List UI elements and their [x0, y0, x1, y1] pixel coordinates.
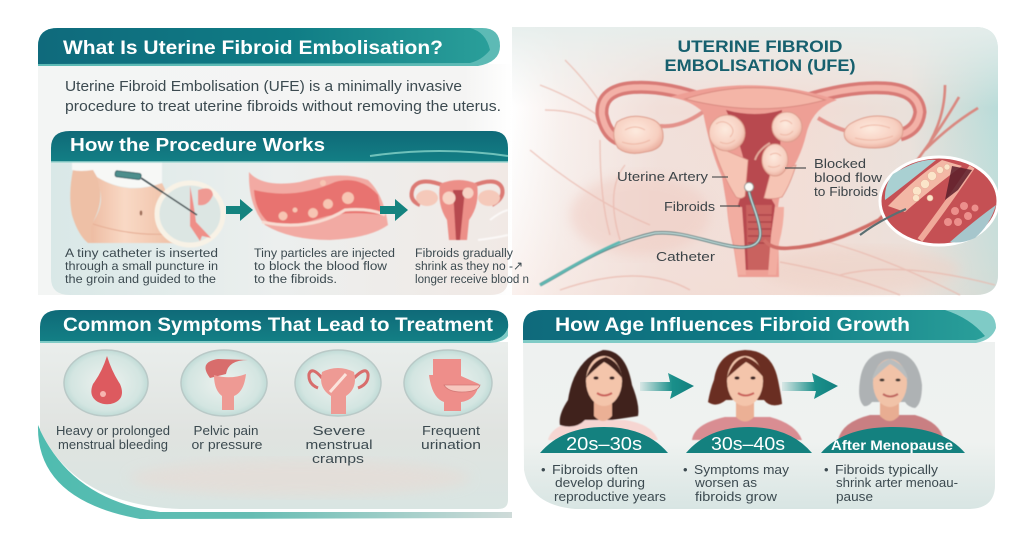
- caption: step 2: [254, 246, 395, 286]
- label: blocked blood flow: to Fibroids: [814, 184, 878, 199]
- text: age 3 note: shrink arter menoau-: [836, 475, 958, 490]
- panel: common symptoms: [38, 310, 512, 519]
- text: age 1 note: reproductive years: [554, 489, 667, 504]
- panel: age and fibroid growth: [523, 310, 996, 509]
- arrow: age 2 to 3: [782, 373, 838, 399]
- badge: 20s-30s: 20s–30s: [566, 434, 642, 454]
- fallopian tubes: [602, 87, 920, 140]
- text: symptom 3: menstrual: [306, 437, 373, 452]
- header: common symptoms: [40, 310, 508, 343]
- illustration: small uterus: [412, 180, 508, 240]
- right artery: [764, 167, 912, 248]
- inset: blocked artery close-up: [860, 157, 998, 245]
- header: age and fibroid growth: How Age Influences Fibroid Growth: [555, 315, 910, 336]
- caption: step 3: Fibroids gradually: [415, 246, 514, 260]
- right-side artery branches: [912, 85, 978, 167]
- illustration: artery cross-section: [249, 172, 388, 240]
- text: age 3 note: Fibroids typically: [835, 462, 939, 477]
- text: age 2 note: •: [683, 462, 688, 477]
- label: blocked blood flow: blood flow: [814, 170, 883, 185]
- label: blocked blood flow: [785, 156, 883, 199]
- badge: 30s-40s: 30s–40s: [711, 434, 785, 454]
- label: fibroids: [664, 199, 740, 214]
- text: age 2 note: [683, 462, 790, 504]
- text: age 3 note: [824, 462, 958, 504]
- text: symptom 1: Heavy or prolonged: [56, 424, 170, 438]
- header: common symptoms: Common Symptoms That Lead to Treatment: [63, 315, 494, 336]
- panel: what is UFE: [38, 28, 512, 295]
- caption: step 3: [415, 246, 529, 286]
- text: symptom 3: cramps: [312, 451, 365, 466]
- label: uterine artery: Uterine Artery: [617, 169, 708, 184]
- inset: catheter entry: [141, 178, 223, 245]
- badge: 20s-30s: [540, 427, 668, 454]
- text: age 3 note: •: [824, 462, 829, 477]
- text: age 2 note: fibroids grow: [695, 489, 778, 504]
- title: UFE: [664, 37, 856, 75]
- portrait: woman 20s-30s: [548, 350, 658, 440]
- caption: step 2: to block the blood flow: [254, 259, 387, 273]
- text: definition: procedure to treat uterine fibroids without removing the uterus.: [65, 98, 501, 115]
- badge: 30s-40s: [686, 427, 812, 454]
- panel: uterine fibroid embolisation illustration: [512, 27, 998, 295]
- diagram: uterus with fibroids: [540, 85, 978, 285]
- catheter: [540, 192, 760, 285]
- caption: step 1: the groin and guided to the: [65, 272, 216, 286]
- caption: step 2: to the fibroids.: [254, 272, 337, 286]
- panel: how the procedure works: [51, 131, 529, 295]
- text: symptom 1: menstrual bleeding: [58, 438, 168, 452]
- arrow: step 2 to 3: [380, 199, 408, 221]
- uterine body: [670, 85, 837, 277]
- text: symptom 2: Pelvic pain: [194, 424, 258, 438]
- badge: after menopause: After Menopause: [831, 437, 953, 453]
- cervix walls: [728, 207, 746, 275]
- icon: pelvic pain: [181, 350, 267, 416]
- illustration: abdomen with catheter: [70, 163, 175, 243]
- text: definition: [65, 78, 501, 115]
- text: symptom 4: [421, 423, 481, 452]
- text: age 1 note: [541, 462, 667, 504]
- arrow: step 1 to 2: [226, 199, 253, 221]
- text: definition: Uterine Fibroid Embolisation (UFE) is a minimally invasive: [65, 78, 462, 95]
- caption: step 1: [65, 246, 218, 286]
- header: age and fibroid growth: [523, 310, 996, 343]
- icon: toilet: [404, 350, 492, 416]
- text: symptom 2: [192, 424, 262, 452]
- arrow: age 1 to 2: [640, 373, 694, 399]
- text: age 1 note: Fibroids often: [552, 462, 638, 477]
- text: symptom 3: Severe: [312, 423, 366, 438]
- label: blocked blood flow: Blocked: [814, 156, 866, 171]
- text: age 1 note: develop during: [555, 475, 645, 490]
- text: age 2 note: Symptoms may: [694, 462, 790, 477]
- portrait: woman 30s-40s: [692, 350, 802, 440]
- caption: step 3: longer receive blood n: [415, 272, 529, 286]
- caption: step 2: Tiny particles are injected: [254, 246, 395, 260]
- text: age 3 note: pause: [836, 489, 873, 504]
- text: symptom 2: or pressure: [192, 438, 262, 452]
- icon: menstrual cramps: [295, 350, 381, 416]
- header: how the procedure works: How the Procedure Works: [70, 134, 325, 155]
- text: age 1 note: •: [541, 462, 546, 477]
- ovaries and fibroids: [614, 112, 903, 176]
- label: catheter: Catheter: [656, 249, 716, 264]
- text: symptom 4: Frequent: [422, 423, 480, 438]
- caption: step 1: through a small puncture in: [65, 259, 218, 273]
- badge: after menopause: [821, 427, 965, 453]
- header: what is UFE: What Is Uterine Fibroid Embolisation?: [63, 37, 443, 59]
- text: symptom 1: [56, 424, 170, 452]
- header: how the procedure works: [51, 131, 508, 162]
- caption: step 3: shrink as they no -↗: [415, 259, 523, 273]
- title: UFE: UTERINE FIBROID: [678, 37, 842, 56]
- inner wall folds: [713, 145, 748, 198]
- text: symptom 3: [306, 423, 373, 466]
- title: UFE: EMBOLISATION (UFE): [664, 56, 856, 75]
- icon: blood drop: [64, 350, 148, 416]
- label: fibroids: Fibroids: [664, 199, 715, 214]
- portrait: woman after menopause: [838, 351, 944, 440]
- text: age 2 note: worsen as: [694, 475, 758, 490]
- caption: step 1: A tiny catheter is inserted: [65, 246, 218, 260]
- text: symptom 4: urination: [421, 437, 481, 452]
- header: what is UFE: [38, 28, 500, 66]
